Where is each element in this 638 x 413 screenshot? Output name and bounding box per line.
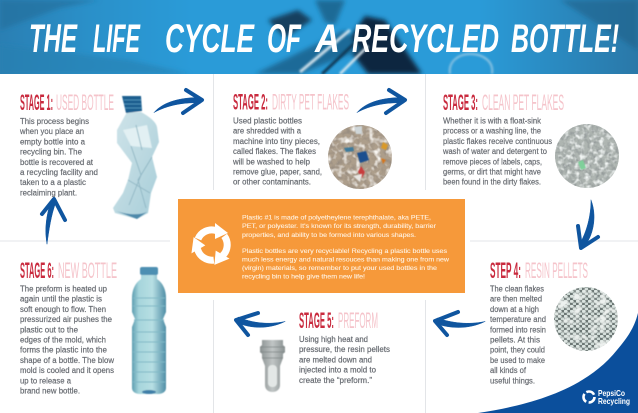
stage 1 text: empty bottle into a bbox=[20, 137, 86, 146]
stage 4 text: be used to make bbox=[490, 356, 546, 365]
icon: clean flakes circle bbox=[555, 124, 619, 188]
stage 2 text: or other contaminants. bbox=[233, 178, 311, 187]
icon: recycle symbol bbox=[185, 223, 238, 270]
stage 6 text: up to release a bbox=[20, 376, 72, 385]
panel: stage 4 resin pellets bbox=[490, 258, 618, 385]
stage 3 text: wash of water and detergent to bbox=[442, 147, 548, 156]
stage 5 text: Using high heat and bbox=[299, 335, 368, 344]
stage 3 text: germs, or dirt that might have bbox=[443, 168, 542, 176]
title: LIFE bbox=[93, 17, 141, 61]
stage 5 text: create the “preform.” bbox=[299, 376, 372, 385]
stage 1 text: This process begins bbox=[20, 117, 89, 126]
icon: dirty flakes circle bbox=[328, 125, 392, 189]
stage 4 text: temperature and bbox=[490, 315, 546, 324]
panel: stage 6 new bottle: NEW BOTTLE bbox=[58, 258, 117, 283]
arrow: stage 3 to 4 bbox=[578, 200, 598, 248]
stage 4 text: all kinds of bbox=[490, 366, 527, 375]
stage 4 text: useful things. bbox=[490, 376, 535, 385]
blue corner swoosh bbox=[478, 313, 638, 413]
stage 6 text: plastic out to the bbox=[20, 325, 79, 334]
stage 3 text: process or a washing line, the bbox=[443, 127, 542, 136]
info text: Plastic #1 is made of polyetheylene terephthalate, aka PETE, bbox=[242, 214, 431, 222]
stage 2 text: called flakes. The flakes bbox=[233, 147, 316, 156]
stage 6 text: pressurized air pushes the bbox=[20, 315, 113, 324]
stage 6 text: again until the plastic is bbox=[20, 295, 102, 304]
stage 1 text: when you place an bbox=[19, 127, 84, 136]
stage 2 text: will be washed to help bbox=[232, 157, 311, 166]
stage 5 text bbox=[299, 335, 390, 385]
title: A bbox=[314, 17, 340, 61]
stage 1 heading: STAGE 1: bbox=[20, 90, 53, 115]
panel: stage 1 used bottle bbox=[19, 90, 159, 219]
stage 2 text: are shredded with a bbox=[233, 127, 302, 136]
stage 5 text: pressure, the resin pellets bbox=[299, 345, 390, 354]
stage 5 heading: STAGE 5: bbox=[299, 308, 334, 333]
stage 6 text: soft enough to flow. Then bbox=[20, 305, 106, 314]
stage 3 text: Whether it is with a float-sink bbox=[443, 116, 542, 126]
stage 4 heading: STEP 4: bbox=[490, 258, 521, 283]
stage 3 text bbox=[442, 116, 552, 187]
panel: stage 2 dirty PET flakes bbox=[232, 90, 392, 189]
info text: much less energy and natural resouces than making one from new bbox=[242, 256, 449, 264]
arrow: stage 6 to 1 bbox=[42, 199, 65, 244]
stage 6 text: mold is cooled and it opens bbox=[20, 366, 114, 375]
arrow: stage 4 to 5 bbox=[435, 312, 485, 335]
logo: PepsiCo Recycling: PepsiCo bbox=[598, 388, 625, 398]
stage 4 text: point, they could bbox=[490, 346, 545, 355]
icon: pellets circle bbox=[554, 287, 618, 351]
stage 4 text: down at a high bbox=[490, 305, 539, 314]
arrow: stage 5 to 6 bbox=[236, 313, 285, 335]
stage 4 text bbox=[490, 284, 546, 385]
stage 3 heading: STAGE 3: bbox=[443, 90, 478, 115]
header banner bbox=[0, 0, 638, 74]
info text: Plastic bottles are very recyclable! Recycling a plastic bottle uses bbox=[242, 248, 448, 255]
stage 1 text: recycling bin. The bbox=[20, 148, 83, 157]
arrow: stage 2 to 3 bbox=[357, 90, 405, 113]
stage 1 text: reclaiming plant. bbox=[20, 188, 77, 197]
info text: recycling bin to help give them new life! bbox=[242, 274, 365, 280]
info text: (virgin) materials, so remember to put your used bottles in the bbox=[242, 265, 437, 272]
icon: new bottle bbox=[132, 267, 166, 394]
stage 3 text: plastic flakes receive continuous bbox=[443, 137, 552, 146]
icon: preform bbox=[260, 340, 285, 392]
logo: PepsiCo Recycling bbox=[584, 388, 630, 406]
text: PREFORM bbox=[338, 308, 378, 333]
panel: orange info box bbox=[178, 199, 465, 293]
stage 6 text: edges of the mold, which bbox=[20, 336, 106, 344]
panel: stage 3 clean PET flakes bbox=[442, 90, 619, 188]
info text: PET, or polyester. It's known for its strength, durability, barrier bbox=[242, 223, 437, 230]
panel: stage 6 new bottle bbox=[20, 258, 166, 396]
arrow: stage 1 to 2 bbox=[154, 90, 202, 113]
title: OF bbox=[267, 17, 302, 61]
panel: stage 2 dirty PET flakes: DIRTY PET FLAKES bbox=[272, 90, 349, 114]
info text bbox=[242, 214, 449, 280]
stage 6 heading: STAGE 6: bbox=[20, 258, 54, 283]
stage 2 heading: STAGE 2: bbox=[233, 90, 268, 114]
info text: properties, and ability to be formed into various shapes. bbox=[242, 232, 416, 239]
title bbox=[29, 17, 619, 61]
panel: stage 1 used bottle: USED BOTTLE bbox=[56, 90, 114, 115]
stage 2 text: machine into tiny pieces, bbox=[233, 137, 320, 146]
title: CYCLE bbox=[165, 17, 255, 61]
stage 4 text: The clean flakes bbox=[490, 284, 544, 294]
stage 6 text: shape of a bottle. The blow bbox=[20, 356, 114, 365]
stage 6 text: The preform is heated up bbox=[20, 284, 108, 294]
stage 6 text bbox=[20, 284, 114, 396]
stage 1 text: bottle is recovered at bbox=[20, 158, 94, 167]
stage 2 text: remove glue, paper, sand, bbox=[233, 168, 322, 176]
stage 5 text: injected into a mold to bbox=[299, 366, 377, 375]
stage 3 text: been found in the dirty flakes. bbox=[443, 178, 541, 187]
stage 2 text: Used plastic bottles bbox=[233, 116, 302, 126]
title: RECYCLED bbox=[352, 17, 499, 61]
title: THE bbox=[29, 17, 78, 61]
stage 4 text: pellets. At this bbox=[490, 336, 540, 344]
stage 6 text: forms the plastic into the bbox=[20, 346, 108, 355]
stage 5 text: are melted down and bbox=[299, 355, 372, 364]
stage 6 text: brand new bottle. bbox=[20, 386, 80, 396]
icon: crushed bottle bbox=[113, 96, 159, 219]
stage 2 text bbox=[232, 116, 322, 187]
stage 1 text: taken to a a plastic bbox=[20, 178, 86, 187]
panel: stage 5 preform bbox=[260, 308, 390, 392]
stage 1 text bbox=[19, 117, 98, 197]
stage 4 text: formed into resin bbox=[490, 325, 546, 334]
stage 1 text: a recycling facility and bbox=[20, 168, 98, 177]
stage 3 text: remove pieces of labels, caps, bbox=[443, 157, 542, 166]
stage 4 text: are then melted bbox=[490, 295, 542, 304]
logo: PepsiCo Recycling: Recycling bbox=[598, 396, 630, 406]
